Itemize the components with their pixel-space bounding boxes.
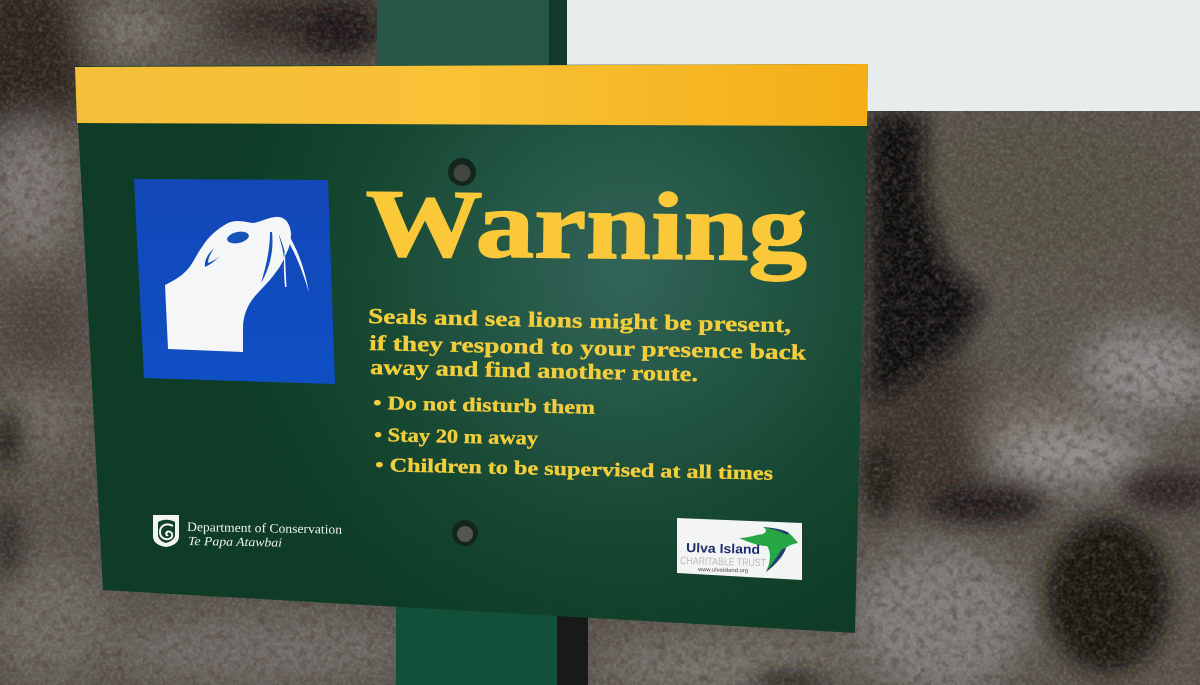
icon: sea lion on blue square bbox=[134, 179, 335, 384]
screw, bottom bbox=[452, 520, 478, 546]
bullet list: rules bbox=[373, 393, 774, 485]
sticker title: Ulva Island bbox=[686, 540, 760, 557]
text block: seal advice: Seals and sea lions might be present, bbox=[368, 304, 791, 337]
bullet list: rules: • Children to be supervised at all times bbox=[375, 455, 774, 485]
icon: green bird bbox=[739, 527, 798, 572]
logo: Department of Conservation: Te Papa Atawbai bbox=[188, 534, 283, 550]
seal eye bbox=[226, 230, 250, 245]
seal whiskers bbox=[261, 232, 309, 293]
text block: seal advice: away and find another route. bbox=[370, 355, 698, 386]
wooden post, lower section bbox=[396, 600, 588, 685]
sticker URL: www.ulvaisland.org bbox=[697, 567, 748, 574]
white board at top right bbox=[567, 0, 1200, 111]
sticker subtitle: CHARITABLE TRUST bbox=[680, 555, 767, 569]
text block: seal advice: if they respond to your presence back bbox=[369, 331, 806, 365]
icon: DOC shield bbox=[153, 515, 179, 547]
bullet list: rules: • Stay 20 m away bbox=[374, 425, 539, 450]
heading: Warning: Warning bbox=[365, 171, 808, 282]
warning sign panel bbox=[75, 64, 868, 633]
text block: seal advice bbox=[368, 304, 806, 386]
sticker: Ulva Island Charitable Trust bbox=[677, 518, 802, 580]
bullet list: rules: • Do not disturb them bbox=[373, 393, 595, 419]
seal ear bbox=[205, 248, 220, 267]
wooden post, upper section bbox=[377, 0, 567, 70]
sign background bbox=[75, 64, 868, 633]
yellow top band bbox=[75, 64, 868, 126]
logo: Department of Conservation bbox=[153, 515, 343, 550]
screw, top bbox=[448, 158, 476, 186]
logo wordmark: Department of Conservation bbox=[187, 519, 343, 537]
